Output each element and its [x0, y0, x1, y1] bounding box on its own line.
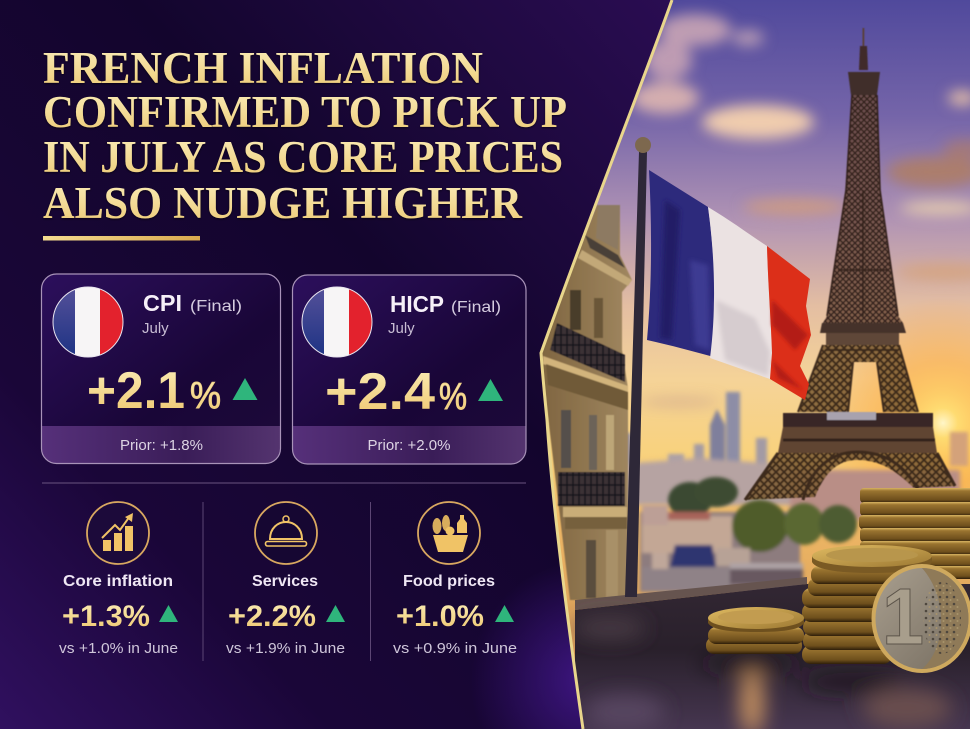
- metric: core inflation: [59, 502, 178, 657]
- metric: services: vs +1.9% in June: [226, 640, 345, 657]
- title: [43, 43, 567, 228]
- panel: CPI card: July: [142, 320, 169, 337]
- icon: flagpole: [625, 137, 651, 597]
- clouds: [631, 14, 970, 406]
- icon: stack of gold coins, back: [859, 488, 970, 579]
- icon: up triangle: [232, 378, 258, 400]
- prior value: Prior: +2.0%: [368, 437, 450, 454]
- heading: HICP: HICP: [390, 291, 444, 317]
- panel: HICP card: July: [388, 320, 415, 337]
- table surface: [575, 584, 970, 729]
- metric: core inflation: vs +1.0% in June: [59, 640, 178, 657]
- title: ALSO NUDGE HIGHER: [43, 178, 522, 228]
- panel: HICP card: [292, 275, 526, 464]
- panel: HICP card: (Final): [451, 299, 501, 316]
- column divider: [370, 502, 371, 661]
- icon: stack of gold coins, middle: [802, 545, 932, 664]
- left panel background: [0, 0, 672, 729]
- icon: one euro coin: [872, 564, 970, 673]
- heading: CPI: CPI: [143, 290, 182, 316]
- panel: CPI card: (Final): [190, 298, 242, 315]
- panel gold edge: [541, 0, 672, 729]
- metric: core inflation: +1.3%: [62, 600, 150, 633]
- metric: services: Services: [252, 573, 318, 590]
- column divider: [202, 502, 204, 661]
- metric: food prices: +1.0%: [396, 600, 484, 633]
- icon: France flag circle: [302, 287, 373, 357]
- ledge: [575, 577, 807, 610]
- metric: core inflation: Core inflation: [63, 573, 173, 590]
- divider: [42, 482, 526, 484]
- icon: waving French flag: [647, 170, 811, 400]
- icon: stack of gold coins, left: [706, 607, 804, 654]
- value: +2.4%: +2.4: [325, 363, 435, 421]
- value: +2.1%: +2.1: [87, 362, 185, 420]
- icon: food basket: [418, 502, 480, 564]
- title: CONFIRMED TO PICK UP: [43, 87, 567, 137]
- icon: one euro coin: 1: [882, 572, 924, 661]
- icon: food cloche: [255, 502, 317, 564]
- value: +2.4%: %: [439, 376, 467, 418]
- title: IN JULY AS CORE PRICES: [43, 132, 563, 182]
- icon: rising chart: [87, 502, 149, 564]
- metric: services: [226, 502, 345, 657]
- icon: up triangle: [478, 379, 503, 401]
- icon: Eiffel Tower: [745, 28, 955, 500]
- icon: France flag circle: [53, 287, 124, 357]
- title: FRENCH INFLATION: [43, 43, 483, 93]
- photo: Paris sunset scene: [520, 0, 970, 729]
- metric: food prices: [393, 502, 517, 657]
- metric: services: +2.2%: [228, 600, 316, 633]
- metric: food prices: vs +0.9% in June: [393, 640, 517, 657]
- trees and town: [612, 477, 857, 595]
- icon: Parisian building: [540, 205, 632, 600]
- value: +2.1%: %: [190, 375, 221, 417]
- metric: food prices: Food prices: [403, 573, 495, 590]
- panel: CPI card: [42, 274, 280, 464]
- distant skyline: [622, 392, 968, 474]
- title underline: [43, 236, 200, 240]
- prior value: Prior: +1.8%: [120, 437, 203, 454]
